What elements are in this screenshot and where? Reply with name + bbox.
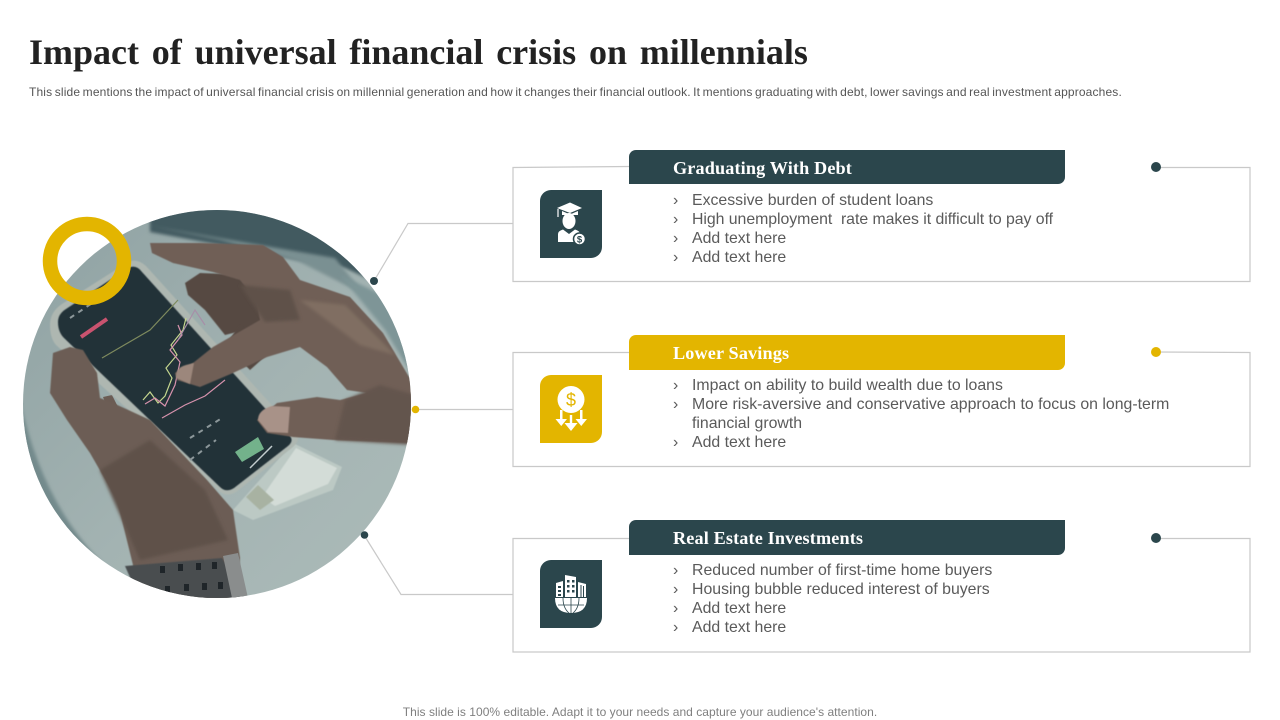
subtitle description: This slide mentions the impact of universal financial crisis on millennial generation and how it changes their financial outlook. It mentions graduating with debt, lower savings and real investment approaches. (29, 85, 1122, 99)
icon: graduate with dollar badge: $ (577, 234, 583, 246)
list: real estate investments: Housing bubble reduced interest of buyers (692, 581, 990, 598)
watch (125, 558, 245, 600)
icon: graduate with dollar badge (540, 190, 602, 258)
footer note: This slide is 100% editable. Adapt it to your needs and capture your audience's attention. (403, 705, 877, 719)
header: Lower Savings (629, 335, 1065, 370)
list: graduating with debt (674, 192, 1054, 266)
list: graduating with debt: High unemployment rate makes it difficult to pay off (692, 211, 1053, 228)
list: lower savings (674, 377, 1169, 451)
list: real estate investments: Reduced number of first-time home buyers (692, 562, 992, 579)
right hand (150, 243, 415, 443)
photo: hands using a smartphone with a trading chart (23, 210, 411, 598)
icon: dollar coin with down arrows: $ (566, 390, 576, 410)
back fingers of the right hand (185, 273, 265, 335)
list: lower savings: financial growth (692, 415, 802, 432)
fingers behind phone on the left hand (103, 395, 117, 406)
list: graduating with debt: Add text here (692, 249, 786, 266)
list: graduating with debt: Add text here (692, 230, 786, 247)
icon: buildings on a globe (540, 560, 602, 628)
list: lower savings: Impact on ability to build wealth due to loans (692, 377, 1003, 394)
header: Graduating With Debt: Graduating With Debt (673, 158, 852, 178)
list: lower savings: Add text here (692, 434, 786, 451)
header: Graduating With Debt (629, 150, 1065, 184)
header: Real Estate Investments: Real Estate Investments (673, 528, 863, 548)
title: Impact of universal financial crisis on millennials (29, 32, 808, 72)
list: real estate investments: Add text here (692, 619, 786, 636)
phone chart (102, 300, 225, 418)
list: lower savings: More risk-aversive and conservative approach to focus on long-term (692, 396, 1169, 413)
list: graduating with debt: Excessive burden of student loans (692, 192, 933, 209)
nails and shading (258, 406, 290, 433)
header: Lower Savings: Lower Savings (673, 343, 789, 363)
gold ring accent (42, 216, 132, 306)
list: real estate investments: Add text here (692, 600, 786, 617)
header: Real Estate Investments (629, 520, 1065, 555)
banknotes (233, 443, 342, 520)
list: real estate investments (674, 562, 992, 636)
phone body (50, 261, 298, 495)
left hand (50, 347, 240, 600)
icon: dollar coin with down arrows (540, 375, 602, 443)
